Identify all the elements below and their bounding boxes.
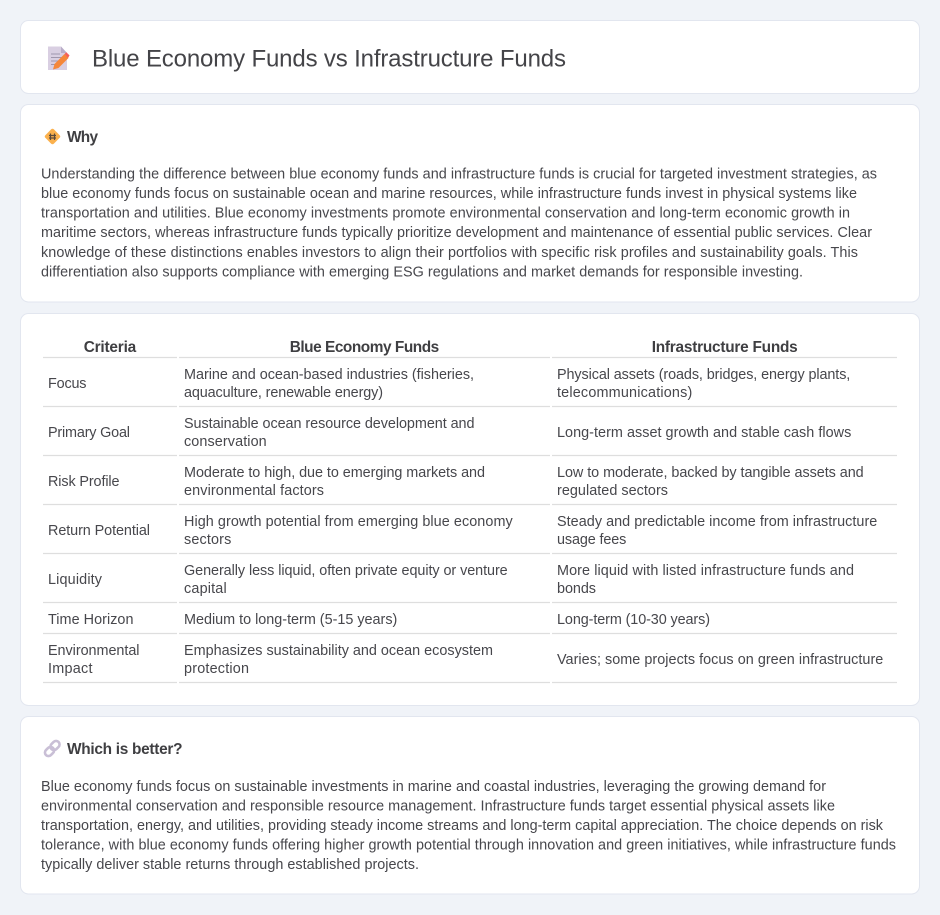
row: focus: Marine and ocean-based industries (fisheries, [184, 367, 474, 383]
text block: which is better paragraph: typically deliver stable returns through established projects. [41, 857, 419, 873]
row: risk profile: regulated sectors [557, 483, 668, 499]
row: risk profile: Low to moderate, backed by tangible assets and [557, 465, 864, 481]
row: liquidity: Generally less liquid, often private equity or venture [184, 563, 508, 579]
text block: why paragraph: knowledge of these distinctions enables investors to align their portfolios with specific risk profiles and sustainability goals. This [41, 245, 858, 261]
panel: which is better [20, 716, 920, 894]
text block: which is better paragraph: environmental conservation and responsible resource management. Infrastructure funds target essential physical assets like [41, 798, 835, 814]
table header row [43, 339, 897, 358]
icon: link [43, 739, 61, 758]
row: time horizon: Time Horizon [48, 612, 134, 628]
row: environmental impact [43, 643, 897, 682]
panel: why [20, 104, 920, 302]
table header row: Infrastructure Funds [652, 339, 798, 356]
row: primary goal: conservation [184, 434, 267, 450]
title: Blue Economy Funds vs Infrastructure Funds [92, 46, 566, 72]
table header row: Criteria [84, 339, 137, 356]
text block: why paragraph: Understanding the difference between blue economy funds and infrastructure funds is crucial for targeted investment strategies, as [41, 166, 877, 182]
text block: why paragraph: transportation and utilities. Blue economy investments promote environmental conservation and long-term economic growth in [41, 206, 850, 222]
row: environmental impact: Impact [48, 661, 92, 677]
row: environmental impact: protection [184, 661, 249, 677]
table header row: Blue Economy Funds [290, 339, 439, 356]
row: liquidity: capital [184, 581, 227, 597]
row: liquidity: bonds [557, 581, 596, 597]
icon: memo with pencil [48, 46, 70, 70]
text block: which is better paragraph: Blue economy funds focus on sustainable investments in marine and coastal industries, leveraging the growing demand for [41, 779, 826, 795]
row: focus: Physical assets (roads, bridges, energy plants, [557, 367, 850, 383]
text block: which is better paragraph [41, 779, 896, 873]
row: risk profile: Moderate to high, due to emerging markets and [184, 465, 485, 481]
text block: which is better paragraph: tolerance, with blue economy funds offering higher growth potential through innovation and green initiatives, while infrastructure funds [41, 838, 896, 854]
row: liquidity [43, 563, 897, 602]
row: primary goal: Primary Goal [48, 425, 130, 441]
row: time horizon: Medium to long-term (5-15 years) [184, 612, 397, 628]
row: focus: aquaculture, renewable energy) [184, 385, 383, 401]
row: return potential [43, 514, 897, 554]
row: risk profile: environmental factors [184, 483, 324, 499]
row: liquidity: Liquidity [48, 572, 103, 588]
row: environmental impact: Varies; some projects focus on green infrastructure [557, 652, 883, 668]
row: risk profile: Risk Profile [48, 474, 120, 490]
row: liquidity: More liquid with listed infrastructure funds and [557, 563, 854, 579]
row: focus: telecommunications) [557, 385, 692, 401]
row: return potential: usage fees [557, 532, 626, 548]
row: risk profile [43, 465, 897, 504]
text block: which is better paragraph: transportation, energy, and utilities, providing steady income streams and long-term capital appreciation. The choice depends on risk [41, 818, 884, 834]
row: return potential: Return Potential [48, 523, 150, 539]
row: return potential: Steady and predictable income from infrastructure [557, 514, 877, 530]
text block: why paragraph [41, 166, 877, 280]
text block: why paragraph: maritime sectors, whereas infrastructure funds typically prioritize development and maintenance of essential public services. Clear [41, 225, 872, 241]
row: focus [43, 367, 897, 406]
panel: comparison table [20, 314, 920, 706]
row: return potential: sectors [184, 532, 231, 548]
heading: why: Why [67, 129, 98, 146]
row: focus: Focus [48, 376, 86, 392]
row: primary goal [43, 416, 897, 456]
row: time horizon [43, 612, 897, 634]
row: primary goal: Long-term asset growth and stable cash flows [557, 425, 851, 441]
icon: diamond warning sign [44, 128, 61, 145]
row: environmental impact: Environmental [48, 643, 140, 659]
row: primary goal: Sustainable ocean resource development and [184, 416, 474, 432]
text block: why paragraph: blue economy funds focus on sustainable ocean and marine resources, while infrastructure funds invest in physical systems like [41, 186, 857, 202]
panel: title header [20, 20, 920, 94]
row: return potential: High growth potential from emerging blue economy [184, 514, 513, 530]
row: time horizon: Long-term (10-30 years) [557, 612, 710, 628]
row: environmental impact: Emphasizes sustainability and ocean ecosystem [184, 643, 493, 659]
text block: why paragraph: differentiation also supports compliance with emerging ESG regulations and market demands for responsible investing. [41, 264, 803, 280]
heading: which is better: Which is better? [67, 741, 182, 758]
